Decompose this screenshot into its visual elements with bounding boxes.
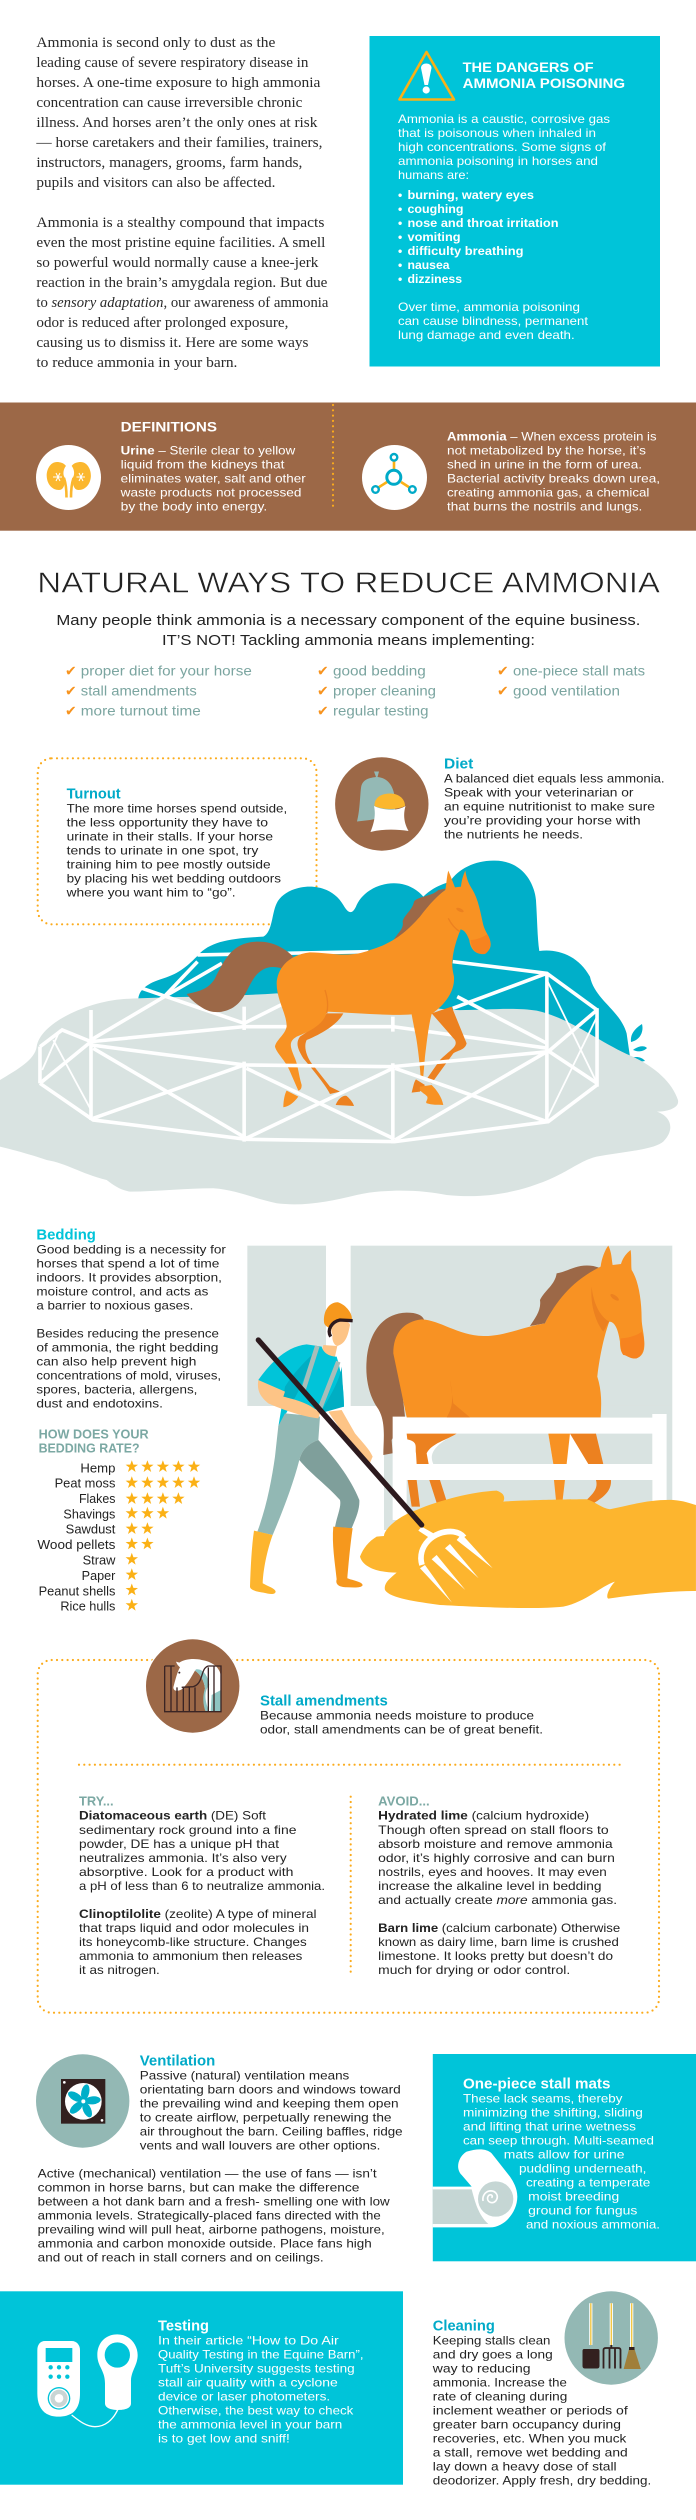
text: testing: Tuft’s University suggests testing bbox=[158, 2361, 355, 2375]
icon: cleaning tools bbox=[564, 2291, 658, 2385]
intro text: horses. A one-time exposure to high ammonia bbox=[36, 75, 321, 91]
text: avoid column: odor, it’s highly corrosive and can burn bbox=[378, 1851, 615, 1865]
text: bedding: indoors. It provides absorption, bbox=[36, 1271, 222, 1285]
checklist: ✔ bbox=[317, 684, 329, 700]
text: diet bbox=[444, 756, 665, 841]
chart: bedding star ratings: Shavings bbox=[63, 1507, 115, 1521]
text: ventilation: Active (mechanical) ventilation — the use of fans — isn’t bbox=[38, 2166, 377, 2180]
checklist: proper cleaning bbox=[333, 683, 436, 699]
text: bedding: can also help prevent high bbox=[36, 1355, 196, 1369]
text: testing: Quality Testing in the Equine Barn”, bbox=[158, 2347, 364, 2361]
checklist: one-piece stall mats bbox=[513, 663, 645, 679]
text: ventilation: vents and wall louvers are other options. bbox=[140, 2138, 380, 2152]
text: avoid column: absorb moisture and remove ammonia bbox=[378, 1837, 613, 1851]
text: urine definition: by the body into energy. bbox=[121, 499, 267, 513]
text: cleaning: greater barn occupancy during bbox=[433, 2417, 621, 2431]
text: cleaning: rate of cleaning during bbox=[433, 2389, 567, 2403]
chart: bedding star ratings: Sawdust bbox=[66, 1523, 116, 1537]
text: one-piece stall mats bbox=[463, 2077, 660, 2232]
text: cleaning bbox=[432, 2318, 651, 2487]
illustration: horse in round pen bbox=[0, 861, 678, 1204]
text: avoid column: much for drying or odor control. bbox=[378, 1963, 570, 1977]
intro text: odor is reduced after prolonged exposure, bbox=[36, 315, 288, 331]
text: long-term effects: can cause blindness, permanent bbox=[398, 314, 589, 328]
text: bedding: spores, bacteria, allergens, bbox=[36, 1383, 197, 1397]
text: ammonia description: that is poisonous when inhaled in bbox=[398, 126, 596, 140]
text: diet: A balanced diet equals less ammonia. bbox=[444, 771, 665, 785]
checklist: ✔ bbox=[317, 664, 329, 680]
text: one-piece stall mats: puddling underneath, bbox=[519, 2162, 646, 2176]
text: bedding: Bedding bbox=[36, 1227, 96, 1243]
text: stall amendments intro: Stall amendments bbox=[260, 1693, 388, 1709]
text: cleaning: Keeping stalls clean bbox=[433, 2333, 550, 2347]
icon: ammonia molecule bbox=[362, 445, 427, 510]
text: ammonia definition bbox=[447, 429, 660, 513]
text: turnout: by placing his wet bedding outdoors bbox=[67, 871, 281, 885]
intro text: leading cause of severe respiratory disease in bbox=[36, 55, 309, 71]
text: cleaning: lay down a heavy dose of stall bbox=[433, 2459, 617, 2473]
text: turnout: where you want him to “go”. bbox=[65, 885, 236, 899]
text: stall amendments intro: Because ammonia needs moisture to produce bbox=[260, 1708, 534, 1722]
text: ventilation: prevailing wind will pull heat, airborne pathogens, moisture, bbox=[38, 2222, 385, 2236]
text: ventilation: ammonia levels. Strategically-placed fans directed with the bbox=[38, 2208, 381, 2222]
checklist: more turnout time bbox=[81, 703, 201, 719]
heading: definitions: DEFINITIONS bbox=[121, 420, 217, 435]
text: ventilation: to create airflow, perpetually renewing the bbox=[140, 2110, 392, 2124]
text: urine definition bbox=[120, 443, 306, 513]
intro text: Ammonia is second only to dust as the bbox=[36, 35, 276, 51]
subtitle: IT’S NOT! Tackling ammonia means implementing: bbox=[162, 632, 535, 649]
list: symptoms: difficulty breathing bbox=[408, 244, 524, 258]
text: try column: its honeycomb-like structure. Changes bbox=[79, 1935, 307, 1949]
icon: air quality meter bbox=[37, 2334, 138, 2427]
icon: kidneys bbox=[36, 445, 101, 510]
heading: how does your bedding rate: BEDDING RATE? bbox=[39, 1442, 140, 1456]
intro text: concentration can cause irreversible chronic bbox=[36, 95, 303, 111]
icon: feed bags bbox=[335, 757, 428, 851]
text: one-piece stall mats: mats allow for urine bbox=[504, 2148, 625, 2162]
list: symptoms: vomiting bbox=[408, 230, 460, 244]
intro text: illness. And horses aren’t the only ones at risk bbox=[36, 115, 318, 131]
text: ammonia description: high concentrations. Some signs of bbox=[398, 140, 607, 154]
text: bedding: of ammonia, the right bedding bbox=[36, 1341, 218, 1355]
text: bedding: concentrations of mold, viruses, bbox=[36, 1369, 221, 1383]
chart: bedding star ratings: Peat moss bbox=[55, 1477, 115, 1491]
checklist: ✔ bbox=[65, 684, 77, 700]
text: try column: Clinoptilolite (zeolite) A type of mineral bbox=[79, 1907, 316, 1921]
text: testing: device or laser photometers. bbox=[158, 2389, 330, 2403]
text: ventilation bbox=[38, 2053, 403, 2264]
intro text: — horse caretakers and their families, trainers, bbox=[35, 135, 322, 151]
text: ammonia definition: Ammonia – When excess protein is bbox=[447, 429, 656, 443]
intro text: even the most pristine equine facilities. A smell bbox=[36, 235, 325, 251]
panel: turnout bbox=[38, 758, 316, 924]
text: avoid column: AVOID... bbox=[378, 1795, 430, 1809]
text: avoid column: and actually create more ammonia gas. bbox=[378, 1893, 617, 1907]
text: bedding: Good bedding is a necessity for bbox=[36, 1243, 226, 1257]
text: turnout: tends to urinate in one spot, try bbox=[67, 843, 258, 857]
text: one-piece stall mats: ground for fungus bbox=[528, 2204, 637, 2218]
list: symptoms: dizziness bbox=[408, 272, 462, 286]
text: ammonia description: Ammonia is a caustic, corrosive gas bbox=[398, 112, 610, 126]
text: avoid column: nostrils, eyes and hooves. It may even bbox=[378, 1865, 607, 1879]
text: cleaning: inclement weather or periods of bbox=[433, 2403, 628, 2417]
text: ventilation: the prevailing wind and keeping them open bbox=[140, 2096, 399, 2110]
text: turnout: the less opportunity they have to bbox=[67, 815, 268, 829]
list: symptoms: coughing bbox=[408, 202, 464, 216]
checklist: stall amendments bbox=[81, 683, 197, 699]
list: symptoms: nose and throat irritation bbox=[408, 216, 558, 230]
text: one-piece stall mats: creating a temperate bbox=[526, 2176, 651, 2190]
text: stall amendments intro: odor, stall amendments can be of great benefit. bbox=[260, 1722, 543, 1736]
checklist: regular testing bbox=[333, 703, 428, 719]
text: stall amendments intro bbox=[260, 1693, 543, 1736]
text: ammonia description bbox=[398, 112, 610, 182]
list: symptoms: • bbox=[398, 244, 402, 258]
text: try column: ammonia to ammonium then releases bbox=[79, 1949, 302, 1963]
text: urine definition: eliminates water, salt and other bbox=[121, 471, 306, 485]
chart: bedding star ratings: Straw bbox=[83, 1553, 116, 1567]
intro text: instructors, managers, grooms, farm hands, bbox=[36, 155, 302, 171]
text: one-piece stall mats: These lack seams, thereby bbox=[463, 2092, 622, 2106]
text: avoid column: Barn lime (calcium carbonate) Otherwise bbox=[378, 1921, 621, 1935]
text: bedding: horses that spend a lot of time bbox=[36, 1257, 220, 1271]
text: ventilation: ammonia and carbon monoxide outside. Place fans high bbox=[38, 2236, 372, 2250]
text: try column: it as nitrogen. bbox=[79, 1963, 160, 1977]
text: one-piece stall mats: and noxious ammonia. bbox=[526, 2218, 660, 2232]
text: ventilation: Ventilation bbox=[140, 2053, 215, 2069]
text: avoid column: increase the alkaline level in bedding bbox=[378, 1879, 602, 1893]
heading: dangers: AMMONIA POISONING bbox=[463, 76, 625, 91]
text: ventilation: common in horse barns, but can make the difference bbox=[38, 2180, 360, 2194]
text: try column: a pH of less than 6 to neutralize ammonia. bbox=[79, 1879, 325, 1893]
text: ammonia definition: Bacterial activity breaks down urea, bbox=[447, 471, 660, 485]
text: cleaning: a stall, remove wet bedding and bbox=[433, 2445, 628, 2459]
text: diet: you’re providing your horse with bbox=[444, 813, 641, 827]
icon: barn fan bbox=[36, 2054, 129, 2148]
text: ventilation: orientating barn doors and windows toward bbox=[140, 2082, 401, 2096]
icon: rolled mat bbox=[433, 2149, 517, 2227]
text: long-term effects bbox=[398, 300, 589, 342]
list: symptoms: nausea bbox=[408, 258, 450, 272]
panel: testing bbox=[0, 2291, 403, 2485]
text: bedding: dust and endotoxins. bbox=[36, 1397, 163, 1411]
text: ventilation: air throughout the barn. Ceiling baffles, ridge bbox=[140, 2124, 403, 2138]
text: long-term effects: lung damage and even death. bbox=[398, 328, 575, 342]
text: avoid column: known as dairy lime, barn lime is crushed bbox=[378, 1935, 619, 1949]
heading: how does your bedding rate: HOW DOES YOUR bbox=[39, 1428, 149, 1442]
intro text: reaction in the brain’s amygdala region. But due bbox=[36, 275, 328, 291]
text: ammonia definition: that burns the nostrils and lungs. bbox=[447, 499, 642, 513]
text: one-piece stall mats: and lifting that urine wetness bbox=[463, 2120, 636, 2134]
chart: bedding star ratings bbox=[37, 1428, 200, 1614]
checklist: good ventilation bbox=[513, 683, 620, 699]
panel: stall amendments bbox=[38, 1638, 659, 2013]
text: cleaning: Cleaning bbox=[433, 2318, 495, 2334]
text: cleaning: deodorizer. Apply fresh, dry bedding. bbox=[433, 2473, 651, 2487]
heading: turnout: Turnout bbox=[67, 786, 121, 802]
text: avoid column bbox=[378, 1795, 621, 1977]
text: turnout: training him to pee mostly outside bbox=[67, 857, 271, 871]
heading: dangers bbox=[463, 60, 625, 91]
subtitle bbox=[56, 612, 640, 649]
text: testing: the ammonia level in your barn bbox=[158, 2417, 342, 2431]
intro text: to reduce ammonia in your barn. bbox=[36, 355, 237, 371]
checklist: ✔ bbox=[497, 664, 509, 680]
text: testing: Testing bbox=[158, 2318, 209, 2334]
intro text bbox=[35, 35, 329, 371]
intro text: to sensory adaptation, our awareness of ammonia bbox=[36, 295, 329, 311]
text: urine definition: Urine – Sterile clear to yellow bbox=[121, 443, 296, 457]
text: testing: In their article “How to Do Air bbox=[158, 2333, 339, 2347]
intro text: pupils and visitors can also be affected. bbox=[36, 175, 275, 191]
panel: dangers of ammonia poisoning bbox=[370, 36, 660, 366]
intro text: so powerful would normally cause a knee-jerk bbox=[36, 255, 319, 271]
title: NATURAL WAYS TO REDUCE AMMONIA bbox=[37, 568, 661, 600]
text: cleaning: recoveries, etc. When you muck bbox=[433, 2431, 627, 2445]
list: symptoms: • bbox=[398, 230, 402, 244]
subtitle: Many people think ammonia is a necessary component of the equine business. bbox=[56, 612, 640, 629]
text: avoid column: limestone. It looks pretty but doesn’t do bbox=[378, 1949, 613, 1963]
checklist: ✔ bbox=[65, 664, 77, 680]
checklist: good bedding bbox=[333, 663, 426, 679]
text: try column: Diatomaceous earth (DE) Soft bbox=[79, 1809, 267, 1823]
text: try column: powder, DE has a unique pH that bbox=[79, 1837, 280, 1851]
text: ammonia definition: shed in urine in the form of urea. bbox=[447, 457, 642, 471]
icon: warning triangle bbox=[400, 52, 454, 100]
list: symptoms: • bbox=[398, 188, 402, 202]
text: try column: neutralizes ammonia. It’s also very bbox=[79, 1851, 287, 1865]
text: ammonia definition: not metabolized by the horse, it’s bbox=[447, 443, 646, 457]
text: bedding bbox=[36, 1227, 226, 1411]
text: diet: the nutrients he needs. bbox=[444, 827, 583, 841]
list: symptoms: burning, watery eyes bbox=[408, 188, 534, 202]
text: turnout bbox=[65, 801, 287, 899]
panel: one-piece stall mats bbox=[433, 2054, 696, 2261]
text: ventilation: between a hot dank barn and a fresh- smelling one with low bbox=[38, 2194, 390, 2208]
text: turnout: urinate in their stalls. If your horse bbox=[67, 829, 273, 843]
text: diet: Speak with your veterinarian or bbox=[444, 785, 634, 799]
chart: bedding star ratings: Wood pellets bbox=[37, 1538, 115, 1552]
text: urine definition: liquid from the kidneys that bbox=[121, 457, 285, 471]
chart: bedding star ratings: Peanut shells bbox=[39, 1584, 115, 1598]
checklist: ✔ bbox=[317, 704, 329, 720]
text: ventilation: Passive (natural) ventilation means bbox=[140, 2068, 349, 2082]
icon: horse in stall bbox=[145, 1638, 241, 1734]
list: symptoms: • bbox=[398, 258, 402, 272]
text: testing bbox=[158, 2318, 364, 2445]
list: symptoms: • bbox=[398, 202, 402, 216]
text: diet: an equine nutritionist to make sure bbox=[444, 799, 655, 813]
text: long-term effects: Over time, ammonia poisoning bbox=[398, 300, 580, 314]
text: ammonia description: humans are: bbox=[398, 168, 469, 182]
text: bedding: a barrier to noxious gases. bbox=[36, 1299, 193, 1313]
text: avoid column: Hydrated lime (calcium hydroxide) bbox=[378, 1809, 589, 1823]
text: cleaning: and dry goes a long bbox=[433, 2347, 553, 2361]
text: bedding: moisture control, and acts as bbox=[36, 1285, 208, 1299]
text: turnout: The more time horses spend outside, bbox=[67, 801, 287, 815]
text: testing: is to get low and sniff! bbox=[158, 2431, 290, 2445]
text: try column bbox=[79, 1795, 325, 1977]
chart: bedding star ratings: Rice hulls bbox=[60, 1600, 115, 1614]
text: one-piece stall mats: can seep through. Multi-seamed bbox=[463, 2134, 654, 2148]
checklist: ✔ bbox=[497, 684, 509, 700]
text: urine definition: waste products not processed bbox=[120, 485, 301, 499]
text: diet: Diet bbox=[444, 756, 473, 772]
text: ammonia description: ammonia poisoning in horses and bbox=[398, 154, 598, 168]
checklist bbox=[65, 663, 645, 720]
text: avoid column: Though often spread on stall floors to bbox=[378, 1823, 609, 1837]
text: cleaning: ammonia. Increase the bbox=[433, 2375, 567, 2389]
intro text: causing us to dismiss it. Here are some ways bbox=[36, 335, 309, 351]
text: ammonia definition: creating ammonia gas, a chemical bbox=[447, 485, 649, 499]
list: symptoms bbox=[398, 188, 558, 286]
chart: bedding star ratings: Hemp bbox=[80, 1461, 115, 1475]
panel: definitions bbox=[0, 402, 696, 531]
text: try column: TRY... bbox=[79, 1795, 114, 1809]
heading: dangers: THE DANGERS OF bbox=[463, 60, 594, 75]
text: try column: that traps liquid and odor molecules in bbox=[79, 1921, 309, 1935]
chart: bedding star ratings: Flakes bbox=[79, 1492, 115, 1506]
text: bedding: Besides reducing the presence bbox=[36, 1327, 219, 1341]
text: try column: absorptive. Look for a product with bbox=[79, 1865, 293, 1879]
text: testing: stall air quality with a cyclone bbox=[158, 2375, 338, 2389]
chart: bedding star ratings: Paper bbox=[82, 1569, 115, 1583]
list: symptoms: • bbox=[398, 216, 402, 230]
checklist: ✔ bbox=[65, 704, 77, 720]
illustration: farmer forking bedding by horse bbox=[247, 1246, 696, 1608]
checklist: proper diet for your horse bbox=[81, 663, 252, 679]
text: one-piece stall mats: minimizing the shifting, sliding bbox=[463, 2106, 643, 2120]
text: testing: Otherwise, the best way to check bbox=[158, 2403, 354, 2417]
heading: how does your bedding rate bbox=[39, 1428, 149, 1456]
text: one-piece stall mats: One-piece stall mats bbox=[463, 2077, 610, 2093]
text: one-piece stall mats: moist breeding bbox=[528, 2190, 619, 2204]
intro text: Ammonia is a stealthy compound that impacts bbox=[36, 215, 325, 231]
text: try column: sedimentary rock ground into a fine bbox=[79, 1823, 297, 1837]
text: cleaning: way to reducing bbox=[432, 2361, 530, 2375]
list: symptoms: • bbox=[398, 272, 402, 286]
text: ventilation: and out of reach in stall corners and on ceilings. bbox=[38, 2250, 324, 2264]
